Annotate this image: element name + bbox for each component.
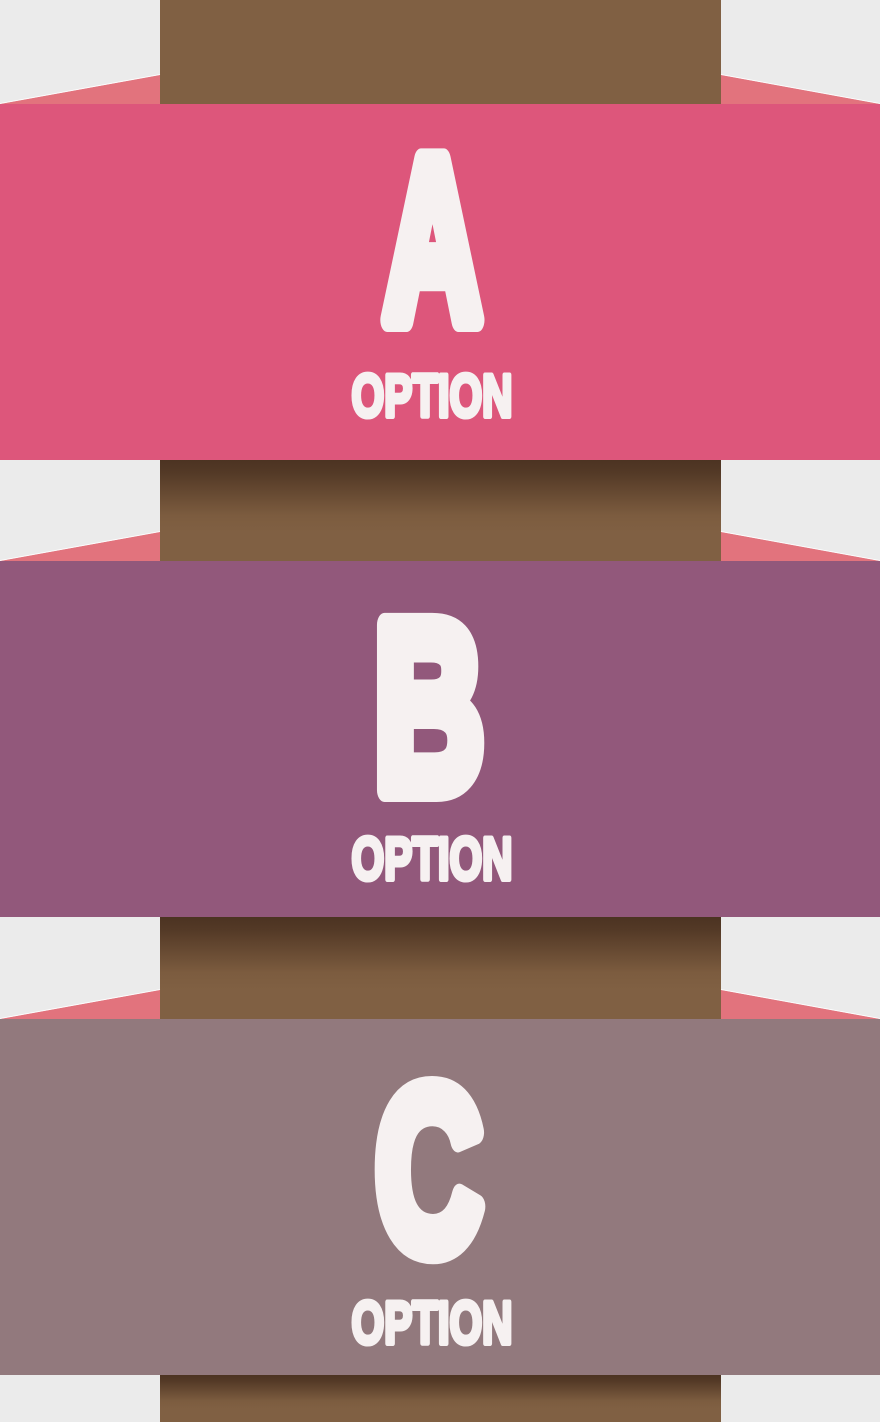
label: option C: OPTION xyxy=(352,1289,512,1356)
panel: option A xyxy=(0,104,880,460)
brown strip: bottom xyxy=(160,1375,721,1422)
brown strip: between A and B xyxy=(160,460,721,561)
brown strip: top xyxy=(160,0,721,104)
fold triangles: option C xyxy=(0,990,880,1019)
panel: option C xyxy=(0,1019,880,1375)
letter B: B xyxy=(374,572,484,841)
letter C: C xyxy=(376,1041,482,1300)
label: option A: OPTION xyxy=(352,362,512,429)
panel: option B xyxy=(0,561,880,917)
fold triangles: option B xyxy=(0,532,880,561)
letter A: A xyxy=(384,111,481,370)
brown strip: between B and C xyxy=(160,917,721,1019)
fold triangles: option A xyxy=(0,74,880,104)
label: option B: OPTION xyxy=(352,825,512,892)
